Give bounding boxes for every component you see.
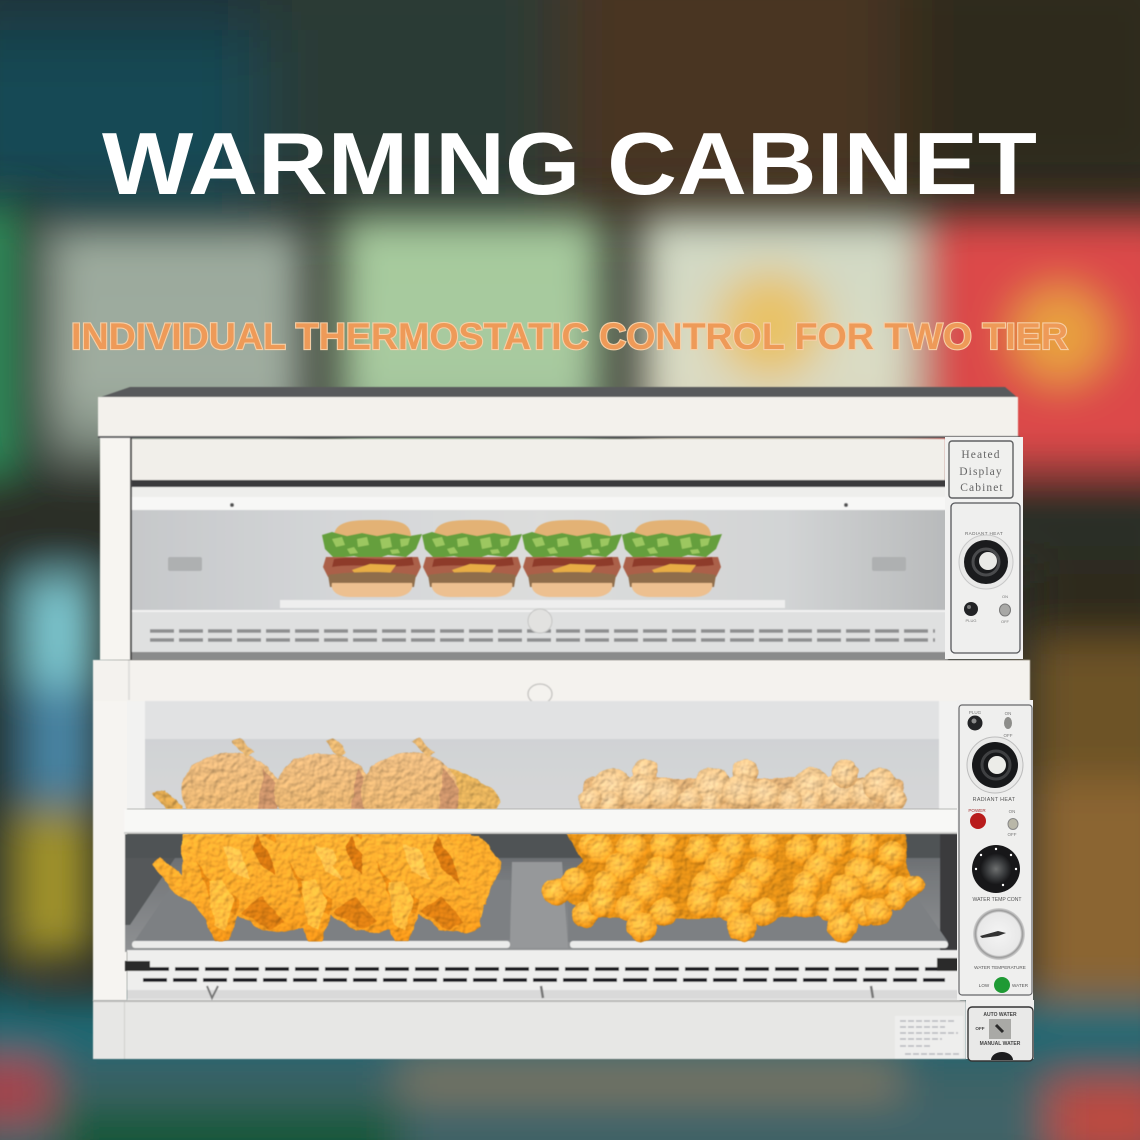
fried chicken behind upper glass <box>151 737 501 809</box>
lower control panel: OFF <box>1004 733 1013 738</box>
dial: water temperature control <box>972 845 1020 893</box>
food trays <box>132 880 948 948</box>
water switch panel: OFF <box>975 1026 985 1031</box>
top control panel: OFF <box>1001 619 1010 624</box>
top control panel: ON <box>1002 594 1008 599</box>
water switch panel: MANUAL WATER <box>980 1041 1021 1047</box>
warming cabinet appliance <box>93 387 1034 1061</box>
nuggets behind upper glass <box>578 759 907 813</box>
fried chicken on tray <box>152 832 502 941</box>
lower control panel: OFF <box>1008 832 1017 837</box>
top control panel: PLUG <box>966 618 976 623</box>
lower control panel: WATER TEMP CONT <box>972 897 1022 903</box>
nuggets on tray <box>542 832 925 942</box>
lower control panel: PLUG <box>969 710 982 715</box>
lower control panel <box>957 700 1033 1000</box>
water temperature gauge <box>973 908 1025 960</box>
water switch panel: AUTO WATER <box>983 1012 1017 1018</box>
title: WARMING CABINET <box>102 114 1037 213</box>
lower tier cabinet <box>93 660 1030 1001</box>
lower control panel: ON <box>1009 809 1015 814</box>
nameplate: Heated <box>961 449 1001 461</box>
front rail and vent panel <box>93 809 966 1059</box>
top control panel <box>945 437 1023 659</box>
lower control panel: LOW <box>979 983 990 988</box>
nameplate: Display <box>959 466 1003 478</box>
lower control panel: RADIANT HEAT <box>973 797 1016 803</box>
top control panel: RADIANT HEAT <box>965 531 1003 536</box>
water switch panel <box>966 1000 1034 1061</box>
top tier cabinet <box>98 387 1020 660</box>
nameplate: Cabinet <box>960 482 1004 494</box>
dial: radiant heat lower <box>967 737 1023 793</box>
power lamp <box>970 813 986 829</box>
burgers <box>322 520 722 597</box>
subtitle: INDIVIDUAL THERMOSTATIC CONTROL FOR TWO TIER <box>71 316 1068 357</box>
nameplate <box>949 441 1013 498</box>
lower control panel: WATER <box>1012 983 1029 988</box>
lower control panel: WATER TEMPERATURE <box>974 965 1026 970</box>
lower control panel: POWER <box>968 808 986 813</box>
water lamp <box>994 977 1010 993</box>
lower control panel: ON <box>1005 711 1011 716</box>
dial: radiant heat <box>959 535 1013 589</box>
